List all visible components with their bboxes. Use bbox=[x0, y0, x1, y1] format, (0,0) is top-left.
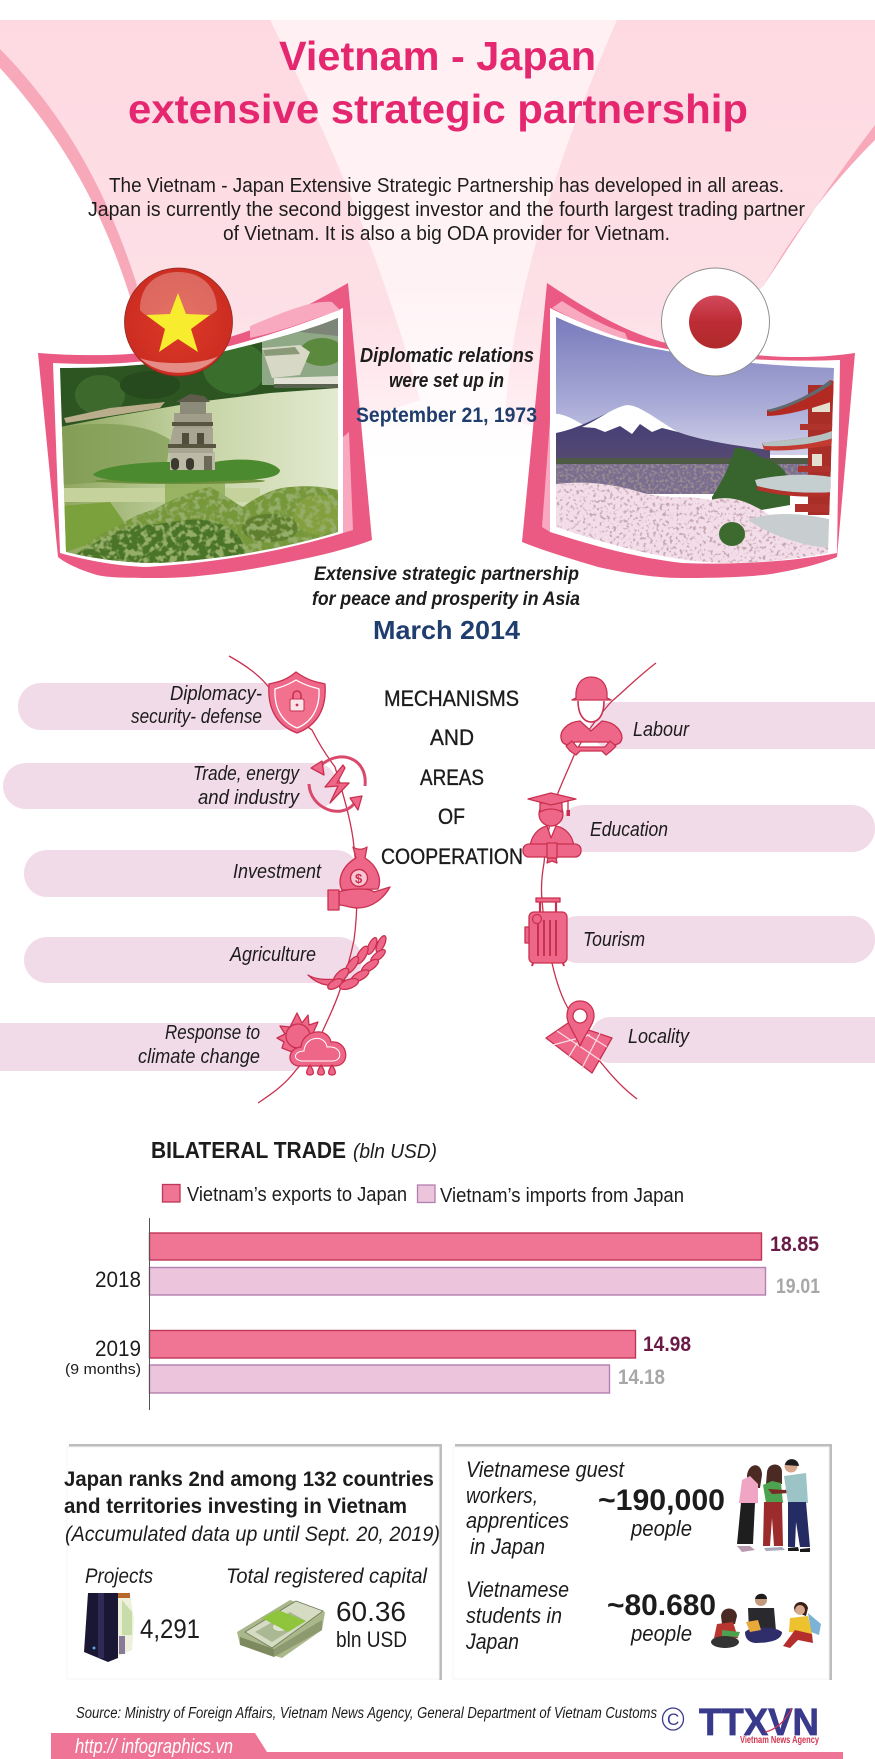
cooperation labels: Diplomacy- bbox=[170, 683, 262, 705]
intro text: The Vietnam - Japan Extensive Strategic Partnership has developed in all areas. bbox=[109, 175, 784, 197]
icon: shield bbox=[269, 672, 325, 733]
mechanisms heading: OF bbox=[438, 804, 465, 829]
diplomatic relations text: September 21, 1973 bbox=[356, 404, 537, 427]
icon: wheat bbox=[308, 934, 388, 992]
mechanisms heading bbox=[381, 686, 523, 869]
icon: sun and rain cloud bbox=[277, 1013, 346, 1075]
panel: investment: Projects bbox=[85, 1565, 153, 1588]
bar chart: 18.85 bbox=[770, 1233, 819, 1256]
logo: TTXVN: TTXVN bbox=[699, 1702, 819, 1744]
icon: graduate bbox=[523, 793, 581, 863]
title bbox=[128, 33, 748, 132]
cooperation labels: climate change bbox=[138, 1046, 260, 1068]
icon: cash stacks bbox=[237, 1600, 325, 1658]
intro text bbox=[88, 175, 805, 245]
cooperation labels: Response to bbox=[165, 1022, 260, 1044]
footer bar bbox=[51, 1733, 843, 1759]
panel: investment: 60.36 bbox=[336, 1596, 406, 1627]
cooperation labels: Locality bbox=[628, 1026, 690, 1048]
footer bar: http:// infographics.vn bbox=[75, 1736, 233, 1758]
panel: people in Japan: people bbox=[630, 1516, 692, 1541]
photo: Hoan Kiem lake bbox=[55, 310, 345, 570]
panel: investment: (Accumulated data up until Sept. 20, 2019) bbox=[65, 1523, 440, 1546]
logo: TTXVN: Vietnam News Agency bbox=[740, 1735, 819, 1746]
legend: Vietnam’s imports from Japan bbox=[440, 1185, 684, 1207]
cooperation labels: Tourism bbox=[583, 929, 645, 951]
panel: people in Japan: in Japan bbox=[470, 1534, 545, 1559]
panel: people in Japan: ~190,000 bbox=[598, 1484, 725, 1517]
bar chart: 2018 bbox=[95, 1267, 141, 1292]
source: Source: Ministry of Foreign Affairs, Vietnam News Agency, General Department of Vietnam Customs bbox=[76, 1705, 657, 1722]
icon: copyright: C bbox=[667, 1710, 679, 1729]
cooperation labels: Agriculture bbox=[229, 944, 316, 966]
legend: Vietnam’s exports to Japan bbox=[187, 1184, 407, 1206]
diplomatic relations text bbox=[356, 345, 537, 427]
bilateral trade heading: (bln USD) bbox=[353, 1141, 437, 1163]
panel: people in Japan: students in bbox=[466, 1603, 562, 1628]
panel: investment: and territories investing in Vietnam bbox=[64, 1495, 407, 1518]
panel: people in Japan: workers, bbox=[466, 1483, 538, 1508]
panel: investment bbox=[64, 1444, 442, 1680]
legend bbox=[162, 1184, 684, 1207]
cooperation labels: Investment bbox=[233, 861, 322, 883]
cooperation labels: security- defense bbox=[131, 706, 262, 728]
photo: Mount Fuji and pagoda bbox=[550, 310, 840, 565]
icon: binder bbox=[84, 1593, 134, 1662]
bar chart: (9 months) bbox=[65, 1361, 141, 1378]
bilateral trade heading: BILATERAL TRADE bbox=[151, 1137, 346, 1163]
panel: Japan photo frame bbox=[522, 283, 855, 578]
icon: worker bbox=[561, 677, 622, 755]
cooperation labels: Trade, energy bbox=[193, 763, 300, 785]
panel: investment: 4,291 bbox=[140, 1614, 200, 1644]
background rays bbox=[0, 20, 875, 460]
icon: three workers bbox=[737, 1459, 810, 1552]
diplomatic relations text: were set up in bbox=[389, 370, 504, 392]
icon: suitcase bbox=[525, 898, 567, 966]
panel: people in Japan: Vietnamese guest bbox=[466, 1457, 625, 1482]
panel: people in Japan: apprentices bbox=[466, 1508, 569, 1533]
icon: map and pin bbox=[546, 1001, 612, 1073]
icon: money bag in hand bbox=[328, 847, 390, 910]
cooperation labels: Labour bbox=[633, 719, 690, 741]
panel: investment: Total registered capital bbox=[226, 1565, 428, 1588]
mechanisms heading: AND bbox=[430, 725, 474, 750]
title: Vietnam - Japan bbox=[279, 33, 596, 79]
intro text: Japan is currently the second biggest investor and the fourth largest trading partner bbox=[88, 199, 805, 221]
panel: left cooperation pills bbox=[0, 683, 362, 1071]
connector curve: right bbox=[541, 663, 656, 1099]
intro text: of Vietnam. It is also a big ODA provider for Vietnam. bbox=[223, 223, 670, 245]
panel: right cooperation pills bbox=[555, 702, 875, 1063]
panel: people in Japan: people bbox=[630, 1621, 692, 1646]
partnership text bbox=[312, 564, 580, 645]
mechanisms heading: MECHANISMS bbox=[384, 686, 519, 711]
mechanisms heading: AREAS bbox=[420, 765, 484, 790]
panel: Hanoi photo frame bbox=[38, 283, 372, 578]
icon: Japan flag bbox=[662, 268, 770, 376]
partnership text: for peace and prosperity in Asia bbox=[312, 589, 580, 610]
panel: people in Japan: ~80.680 bbox=[607, 1589, 716, 1622]
panel: people in Japan: Vietnamese bbox=[466, 1577, 569, 1602]
panel: people in Japan: Japan bbox=[465, 1629, 519, 1654]
bar chart: 2019 bbox=[95, 1336, 141, 1361]
connector curve: left bbox=[229, 656, 357, 1103]
panel: investment: Japan ranks 2nd among 132 countries bbox=[64, 1468, 434, 1491]
diplomatic relations text: Diplomatic relations bbox=[360, 345, 534, 367]
icon: copyright bbox=[662, 1708, 684, 1730]
title: extensive strategic partnership bbox=[128, 86, 748, 132]
icon: money bag in hand: $ bbox=[355, 871, 363, 886]
partnership text: Extensive strategic partnership bbox=[314, 564, 579, 585]
mechanisms heading: COOPERATION bbox=[381, 844, 523, 869]
bar chart: 14.98 bbox=[643, 1333, 691, 1356]
cooperation labels bbox=[131, 683, 690, 1068]
bar chart: 19.01 bbox=[776, 1275, 820, 1298]
icon: energy cycle bbox=[309, 757, 365, 811]
cooperation labels: and industry bbox=[198, 787, 300, 809]
bar chart bbox=[65, 1218, 820, 1410]
icon: Vietnam flag bbox=[124, 268, 232, 376]
bar chart: 14.18 bbox=[618, 1366, 665, 1389]
partnership text: March 2014 bbox=[373, 615, 521, 645]
panel: people in Japan bbox=[453, 1444, 832, 1680]
icon: three students bbox=[711, 1594, 821, 1648]
cooperation labels: Education bbox=[590, 819, 668, 841]
panel: investment: bln USD bbox=[336, 1627, 407, 1652]
